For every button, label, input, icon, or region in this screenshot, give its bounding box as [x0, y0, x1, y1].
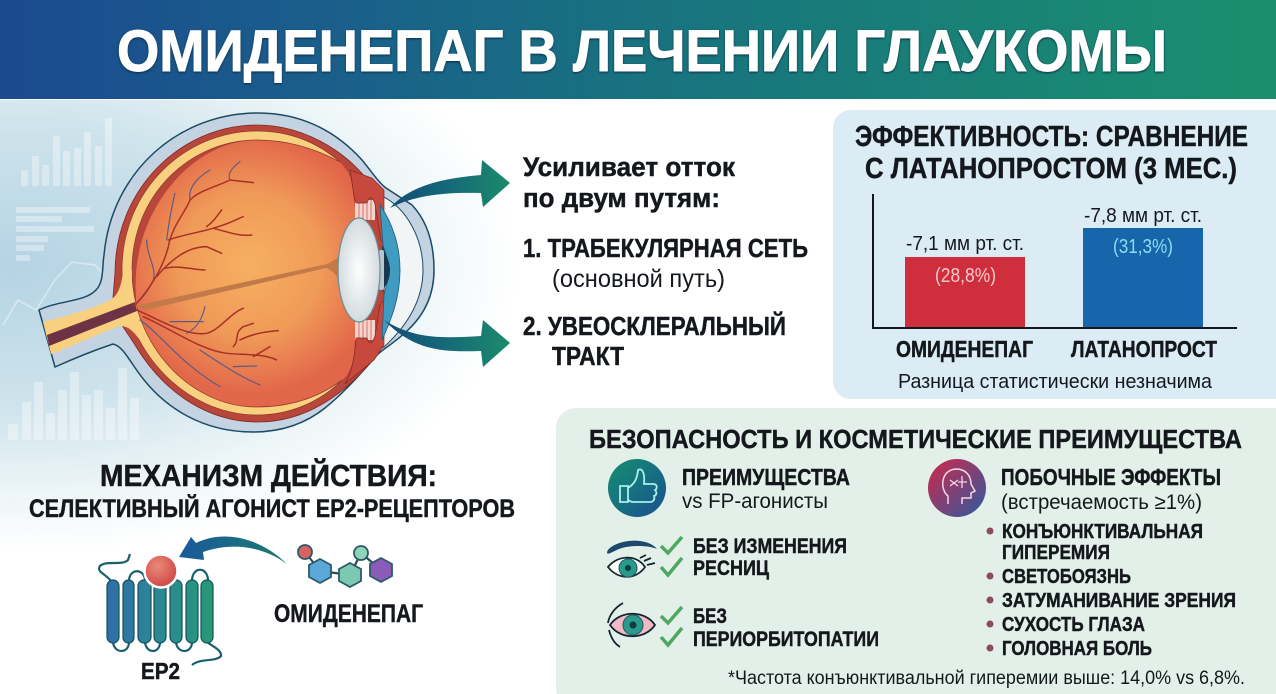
lens — [338, 218, 380, 322]
text block: outflow pathways: ТРАКТ — [552, 341, 624, 371]
efficacy heading: С ЛАТАНОПРОСТОМ (3 МЕС.) — [865, 153, 1237, 185]
bar chart: (28,8%) — [935, 265, 996, 287]
panel: efficacy comparison — [833, 110, 1276, 399]
text block: outflow pathways: (основной путь) — [552, 265, 725, 293]
side effects heading: ПОБОЧНЫЕ ЭФФЕКТЫ — [1001, 464, 1221, 490]
bar chart: ЛАТАНОПРОСТ — [1071, 336, 1217, 362]
text block: outflow pathways: Усиливает отток — [523, 152, 735, 182]
icon: red eye — [608, 603, 655, 647]
text: no eyelash change: БЕЗ ИЗМЕНЕНИЯ — [693, 535, 847, 558]
side effects list: СВЕТОБОЯЗНЬ — [1002, 566, 1131, 588]
icon: omidenepag molecule — [298, 545, 392, 587]
benefits heading — [682, 464, 850, 513]
bar chart: ОМИДЕНЕПАГ — [896, 336, 1033, 362]
check marks: periorbitopathy — [661, 607, 682, 645]
benefits heading: ПРЕИМУЩЕСТВА — [682, 464, 850, 490]
header banner — [0, 0, 1276, 99]
icon: EP2 receptor — [99, 554, 221, 684]
iris — [380, 205, 400, 340]
text: no periorbitopathy — [693, 605, 879, 651]
side effects heading: (встречаемость ≥1%) — [1001, 491, 1202, 514]
icon: eye with lashes — [607, 541, 657, 577]
omidenepag label: ОМИДЕНЕПАГ — [274, 600, 423, 628]
icon: head with brain — [928, 459, 986, 517]
footnote: *Частота конъюнктивальной гиперемии выше: 14,0% vs 6,8%. — [728, 668, 1245, 689]
side effects list: ГИПЕРЕМИЯ — [1002, 542, 1110, 564]
text block: outflow pathways: 2. УВЕОСКЛЕРАЛЬНЫЙ — [523, 311, 786, 341]
ciliary body — [350, 170, 384, 243]
bar chart: -7,8 мм рт. ст. — [1084, 205, 1202, 227]
text: no eyelash change: РЕСНИЦ — [693, 557, 770, 580]
ligand ball — [144, 554, 178, 588]
benefits heading: vs FP-агонисты — [682, 490, 828, 513]
side effects list: ЗАТУМАНИВАНИЕ ЗРЕНИЯ — [1002, 590, 1236, 612]
text block: outflow pathways: 1. ТРАБЕКУЛЯРНАЯ СЕТЬ — [523, 233, 808, 263]
side effects heading — [1001, 464, 1221, 514]
retinal vessels — [133, 162, 278, 387]
title: ОМИДЕНЕПАГ В ЛЕЧЕНИИ ГЛАУКОМЫ — [117, 19, 1167, 84]
efficacy heading — [855, 121, 1248, 185]
bar chart: (31,3%) — [1113, 236, 1173, 258]
eye anatomy illustration — [39, 113, 434, 432]
mechanism heading: СЕЛЕКТИВНЫЙ АГОНИСТ ЕР2-РЕЦЕПТОРОВ — [29, 493, 515, 523]
side effects list: СУХОСТЬ ГЛАЗА — [1002, 614, 1145, 636]
check marks: lashes — [661, 537, 682, 575]
arrow: lower outflow path — [384, 320, 510, 367]
text: no eyelash change — [693, 535, 847, 580]
icon: thumbs up — [608, 459, 666, 517]
text block: outflow pathways: по двум путям: — [523, 183, 720, 213]
text: no periorbitopathy: БЕЗ — [693, 605, 727, 628]
mechanism heading: МЕХАНИЗМ ДЕЙСТВИЯ: — [100, 457, 437, 493]
arrow: upper outflow path — [390, 160, 510, 208]
bar chart: -7,1 мм рт. ст. — [906, 233, 1024, 255]
zonule fibres — [355, 200, 375, 340]
arrow: drug to receptor — [179, 536, 287, 564]
side effects list — [986, 521, 1236, 660]
bar chart — [873, 194, 1237, 362]
EP2 label: ЕР2 — [141, 658, 180, 684]
panel: safety and cosmetic benefits — [556, 408, 1276, 694]
note: difference not significant: Разница статистически незначима — [898, 371, 1213, 393]
text: no periorbitopathy: ПЕРИОРБИТОПАТИИ — [693, 628, 879, 651]
side effects list: ГОЛОВНАЯ БОЛЬ — [1002, 638, 1152, 660]
side effects list: КОНЪЮНКТИВАЛЬНАЯ — [1002, 521, 1203, 543]
text block: outflow pathways — [523, 152, 808, 371]
mechanism heading — [29, 457, 515, 523]
